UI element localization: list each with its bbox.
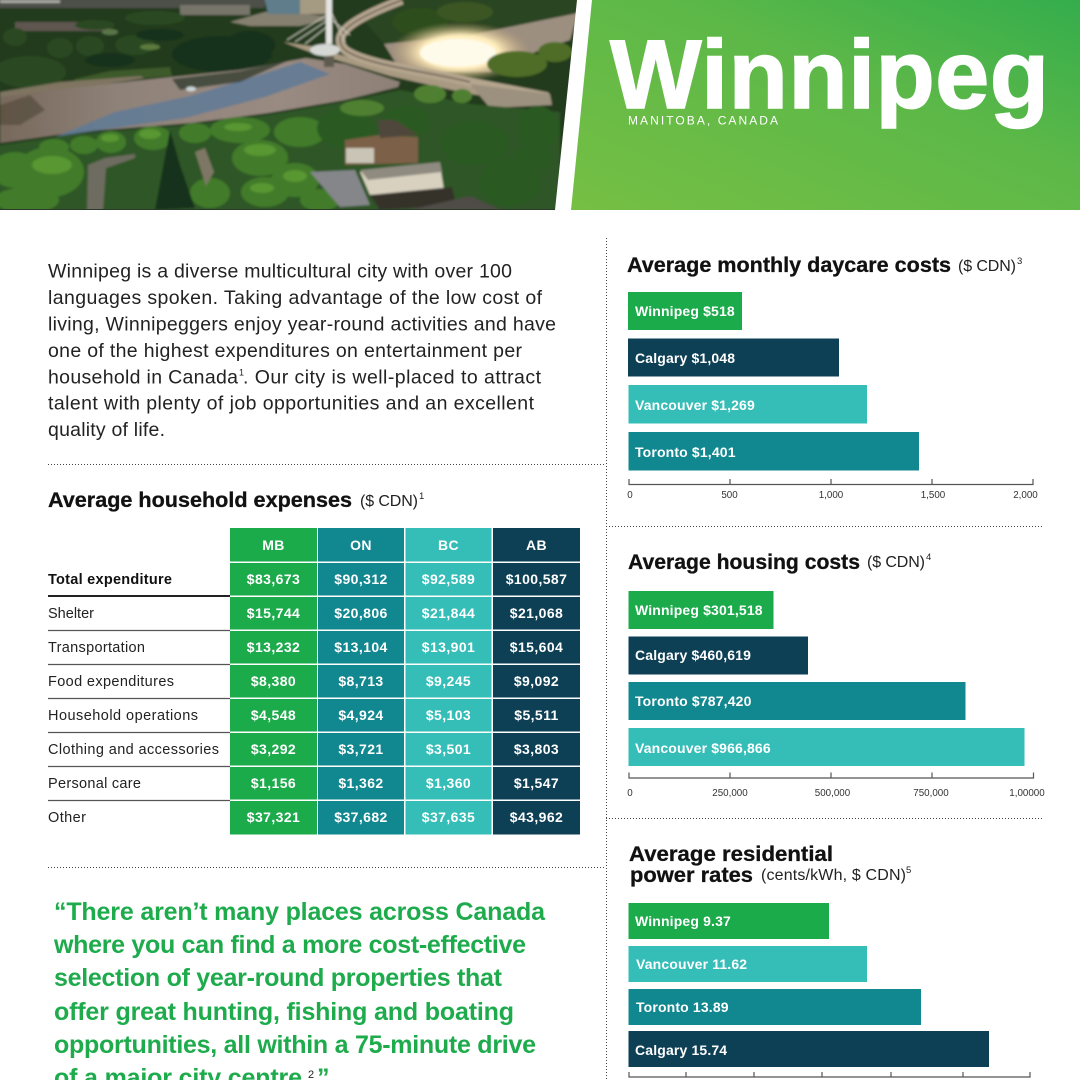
- bar: Toronto: [628, 682, 966, 720]
- axis: housing: [627, 772, 1045, 799]
- upper river and sun: [384, 13, 578, 72]
- axis: housing: 250,000: [712, 788, 748, 799]
- table row labels: [48, 572, 219, 826]
- table values: $37,635: [422, 809, 475, 825]
- heading: power rates: power rates: [630, 864, 753, 887]
- heading: housing costs: 4: [926, 552, 931, 563]
- table row labels: Other: [48, 810, 86, 826]
- bar: Toronto: [628, 989, 921, 1025]
- river: [0, 58, 400, 143]
- intro paragraph: [48, 260, 556, 441]
- bar: Vancouver: [628, 728, 1024, 766]
- table values: $1,360: [426, 775, 471, 791]
- table row labels: Food expenditures: [48, 674, 174, 690]
- table values: $92,589: [422, 571, 475, 587]
- title: Winnipeg: [610, 20, 1049, 129]
- table row labels: Transportation: [48, 640, 145, 656]
- table row labels: Total expenditure: [48, 572, 172, 588]
- intro paragraph: talent with plenty of job opportunities and an excellent: [48, 392, 535, 414]
- bar: Vancouver: [628, 946, 867, 982]
- photo: aerial view of Winnipeg river and bridge: [0, 0, 585, 215]
- table values: $100,587: [506, 571, 567, 587]
- lower tree canopies: [0, 117, 340, 213]
- bar: Vancouver: Vancouver 11.62: [636, 956, 747, 972]
- green title banner: [571, 0, 1080, 210]
- table values: $4,548: [251, 707, 296, 723]
- table values: AB: [526, 537, 547, 553]
- bar: Winnipeg: [628, 292, 742, 330]
- table values: $3,501: [426, 741, 471, 757]
- heading: daycare costs: Average monthly daycare costs: [627, 254, 951, 277]
- axis: daycare: 500: [721, 490, 738, 501]
- bar: Toronto: Toronto $787,420: [635, 693, 752, 709]
- table row labels: Shelter: [48, 606, 94, 622]
- heading: household expenses: ($ CDN): [360, 493, 418, 510]
- axis: housing: 750,000: [913, 788, 949, 799]
- table values: $13,901: [422, 639, 475, 655]
- table values: $21,844: [422, 605, 475, 621]
- bar: Calgary: Calgary $460,619: [635, 647, 751, 663]
- intro paragraph: one of the highest expenditures on entertainment per: [48, 340, 522, 362]
- pull quote: [53, 898, 546, 1080]
- bar: Vancouver: Vancouver $1,269: [635, 397, 755, 413]
- table values: $4,924: [338, 707, 384, 723]
- bar: Calgary: [628, 1031, 989, 1067]
- heading: housing costs: Average housing costs: [628, 551, 860, 574]
- table values: $13,104: [334, 639, 388, 655]
- bar: Winnipeg: [628, 591, 774, 629]
- axis: daycare: 2,000: [1013, 490, 1038, 501]
- table row rules: [48, 596, 230, 800]
- table values: $15,744: [247, 605, 300, 621]
- intro paragraph: 1: [239, 368, 244, 378]
- table values: $43,962: [510, 809, 563, 825]
- table row labels: Personal care: [48, 776, 141, 792]
- intro paragraph: . Our city is well-placed to attract: [243, 366, 542, 388]
- bar: Vancouver: [628, 385, 867, 424]
- table values: $9,245: [426, 673, 471, 689]
- table values: $3,292: [251, 741, 296, 757]
- table values: $83,673: [247, 571, 300, 587]
- table row labels: Clothing and accessories: [48, 742, 219, 758]
- heading: household expenses: 1: [419, 491, 424, 502]
- table values: $9,092: [514, 673, 559, 689]
- axis: housing: 1,00000: [1009, 788, 1045, 799]
- table values: ON: [350, 537, 372, 553]
- axis: daycare: 0: [627, 490, 633, 501]
- intro paragraph: quality of life.: [48, 419, 165, 441]
- table values: $3,721: [338, 741, 384, 757]
- heading: household expenses: Average household expenses: [48, 489, 352, 512]
- intro paragraph: household in Canada: [48, 366, 238, 388]
- heading: daycare costs: ($ CDN): [958, 258, 1016, 275]
- heading: power rates: [629, 843, 911, 887]
- top buildings: [0, 0, 265, 8]
- heading: power rates: 5: [906, 865, 911, 876]
- panel: daycare costs chart: [627, 254, 1038, 501]
- pull quote: “There aren’t many places across Canada: [54, 898, 546, 926]
- heading: daycare costs: 3: [1017, 256, 1022, 267]
- axis: housing: 500,000: [815, 788, 851, 799]
- dotted dividers: [48, 238, 1042, 1080]
- houses: [345, 135, 418, 165]
- bar: Calgary: Calgary $1,048: [635, 350, 735, 366]
- pull quote: where you can find a more cost-effective: [53, 931, 526, 959]
- upper trees: [0, 11, 185, 88]
- pull quote: offer great hunting, fishing and boating: [54, 998, 514, 1026]
- table values: $21,068: [510, 605, 563, 621]
- table values: $90,312: [334, 571, 388, 587]
- table values: $1,547: [514, 775, 559, 791]
- bar: Vancouver: Vancouver $966,866: [635, 740, 771, 756]
- axis: daycare: [627, 479, 1038, 501]
- bar: Toronto: Toronto 13.89: [636, 999, 729, 1015]
- table column fills: [230, 528, 580, 834]
- intro paragraph: Winnipeg is a diverse multicultural city with over 100: [48, 260, 512, 282]
- pull quote: selection of year-round properties that: [54, 964, 503, 992]
- table values: $1,156: [251, 775, 296, 791]
- table values: MB: [262, 537, 285, 553]
- table values: $5,103: [426, 707, 471, 723]
- heading: power rates: (cents/kWh, $ CDN): [761, 867, 906, 884]
- axis: daycare: 1,500: [921, 490, 946, 501]
- bridge: [284, 40, 480, 97]
- axis: power rates: [629, 1072, 1030, 1077]
- bar: Calgary: [628, 338, 839, 376]
- panel: power rates chart: [628, 843, 1030, 1077]
- panel: household expenses table: [48, 489, 580, 834]
- subtitle: MANITOBA, CANADA: [628, 114, 778, 128]
- intro paragraph: languages spoken. Taking advantage of the low cost of: [48, 287, 543, 309]
- heading: housing costs: ($ CDN): [867, 554, 925, 571]
- table values: BC: [438, 537, 459, 553]
- axis: housing: 0: [627, 788, 633, 799]
- table row labels: Household operations: [48, 708, 198, 724]
- table values: $8,380: [251, 673, 296, 689]
- table values: $3,803: [514, 741, 559, 757]
- bar: Winnipeg: Winnipeg 9.37: [635, 913, 731, 929]
- table values: $1,362: [338, 775, 384, 791]
- table values: $8,713: [338, 673, 384, 689]
- axis: daycare: 1,000: [819, 490, 844, 501]
- table values: $13,232: [247, 639, 300, 655]
- table values: $15,604: [510, 639, 563, 655]
- heading: power rates: Average residential: [629, 843, 833, 866]
- bar: Winnipeg: [628, 903, 829, 939]
- bar: Winnipeg: Winnipeg $518: [635, 303, 735, 319]
- right bank trees: [487, 42, 572, 77]
- bar: Calgary: Calgary 15.74: [635, 1042, 727, 1058]
- table values: $37,682: [334, 809, 388, 825]
- lower trees base: [0, 90, 560, 215]
- panel: housing costs chart: [627, 551, 1045, 799]
- bar: Calgary: [628, 636, 808, 674]
- table values: [247, 537, 567, 825]
- bar: Winnipeg: Winnipeg $301,518: [635, 602, 763, 618]
- top right trees and bank: [365, 0, 580, 44]
- pull quote: opportunities, all within a 75-minute drive: [54, 1031, 536, 1059]
- table values: $37,321: [247, 809, 300, 825]
- table values: $5,511: [514, 707, 559, 723]
- table values: $20,806: [334, 605, 388, 621]
- intro paragraph: living, Winnipeggers enjoy year-round activities and have: [48, 314, 556, 336]
- bar: Toronto: Toronto $1,401: [635, 444, 736, 460]
- bar: Toronto: [628, 432, 919, 470]
